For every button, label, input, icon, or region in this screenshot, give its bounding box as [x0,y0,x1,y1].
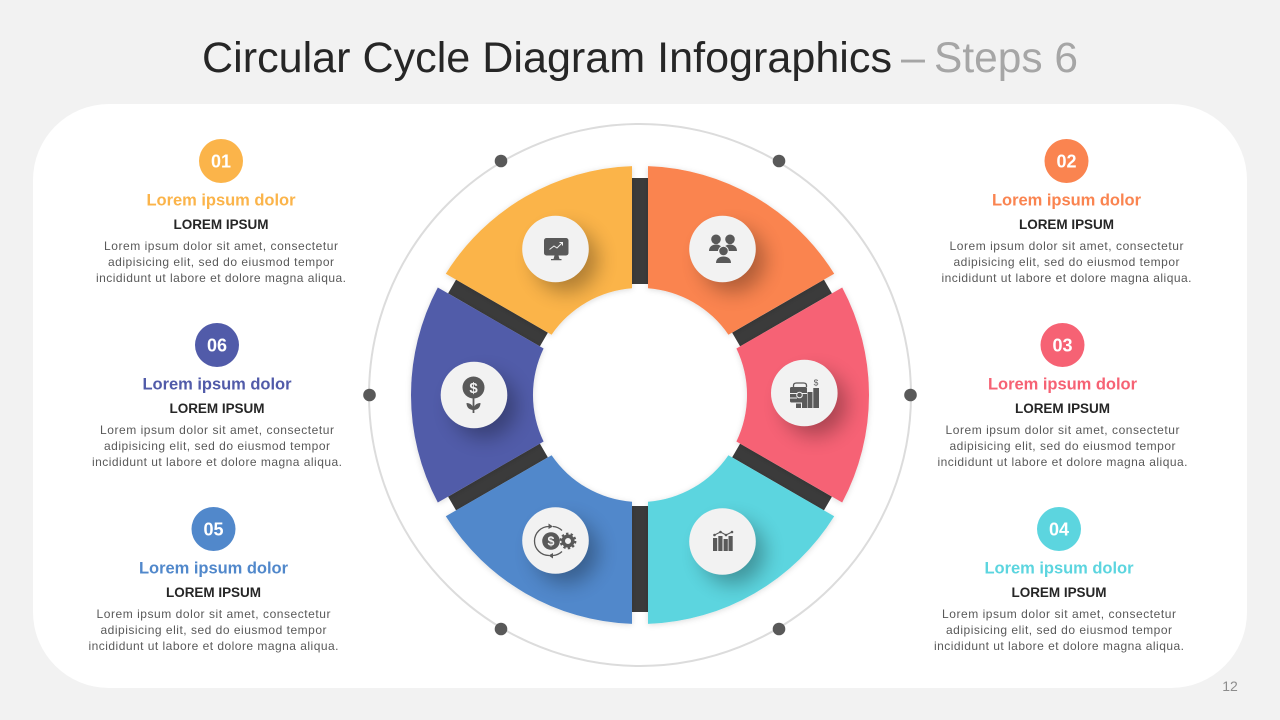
text block 04: Lorem ipsum dolor [984,560,1134,578]
text block 02: incididunt ut labore et dolore magna aliqua. [942,271,1192,285]
text block 02: LOREM IPSUM [1019,217,1114,232]
text block 05: incididunt ut labore et dolore magna aliqua. [88,639,338,653]
text block 02: adipisicing elit, sed do eiusmod tempor [954,255,1180,269]
segment 04 cyan [648,455,834,624]
text block 02: Lorem ipsum dolor [992,192,1142,210]
icon badge 04: bar chart with trend [689,508,765,584]
text block 04: adipisicing elit, sed do eiusmod tempor [946,623,1172,637]
text block 01 [96,139,346,285]
text block 01: adipisicing elit, sed do eiusmod tempor [108,255,334,269]
text block 05: Lorem ipsum dolor sit amet, consectetur [96,607,330,621]
text block 06: incididunt ut labore et dolore magna aliqua. [92,455,342,469]
text block 06: Lorem ipsum dolor [142,376,292,394]
title: Circular Cycle Diagram Infographics [202,34,892,82]
text block 05 [88,507,338,653]
icon badge 03: briefcase and growth bars: $ [814,378,819,388]
page number: 12 [1222,678,1238,694]
text block 03: 03 [1052,336,1073,356]
segment 02 orange [648,166,834,335]
text block 06: adipisicing elit, sed do eiusmod tempor [104,439,330,453]
text block 06: 06 [207,336,227,356]
text block 03: Lorem ipsum dolor sit amet, consectetur [946,423,1180,437]
text block 01: Lorem ipsum dolor [146,192,296,210]
icon badge 05: money cycle and gear: $ [548,534,555,548]
icon badge 05: money cycle and gear [522,507,598,584]
text block 02 [942,139,1192,285]
icon badge 06: money plant [441,362,516,438]
text block 03: incididunt ut labore et dolore magna aliqua. [938,455,1188,469]
text block 01: LOREM IPSUM [174,217,268,232]
text block 01: Lorem ipsum dolor sit amet, consectetur [104,239,338,253]
segment 03 red [736,288,869,502]
text block 01: incididunt ut labore et dolore magna aliqua. [96,271,346,285]
outer ring with dots [363,124,917,666]
text block 03: LOREM IPSUM [1015,401,1110,416]
text block 06: LOREM IPSUM [170,401,264,416]
title: – [901,34,925,82]
text block 06: Lorem ipsum dolor sit amet, consectetur [100,423,334,437]
icon badge 02: people [689,216,765,292]
text block 04: LOREM IPSUM [1012,585,1106,600]
icon badge 06: money plant: $ [469,380,478,397]
text block 04: Lorem ipsum dolor sit amet, consectetur [942,607,1176,621]
text block 02: Lorem ipsum dolor sit amet, consectetur [950,239,1184,253]
segment 06 purple [411,288,544,502]
white content panel [33,104,1247,688]
icon badge 01: monitor chart [522,216,598,292]
text block 04: 04 [1049,520,1069,540]
icon badge 03: briefcase and growth bars [771,360,847,436]
text block 04: incididunt ut labore et dolore magna aliqua. [934,639,1184,653]
text block 03 [938,323,1188,469]
segment 05 blue [446,455,632,624]
text block 03: adipisicing elit, sed do eiusmod tempor [950,439,1176,453]
text block 05: adipisicing elit, sed do eiusmod tempor [100,623,326,637]
dark separator bars [448,178,832,612]
text block 05: Lorem ipsum dolor [139,560,289,578]
text block 06 [92,323,342,469]
segment 01 yellow [446,166,632,335]
text block 04 [934,507,1184,653]
text block 02: 02 [1056,152,1077,172]
text block 05: 05 [203,520,224,540]
text block 05: LOREM IPSUM [166,585,261,600]
text block 01: 01 [211,152,231,172]
title: Steps 6 [934,34,1078,82]
text block 03: Lorem ipsum dolor [988,376,1138,394]
